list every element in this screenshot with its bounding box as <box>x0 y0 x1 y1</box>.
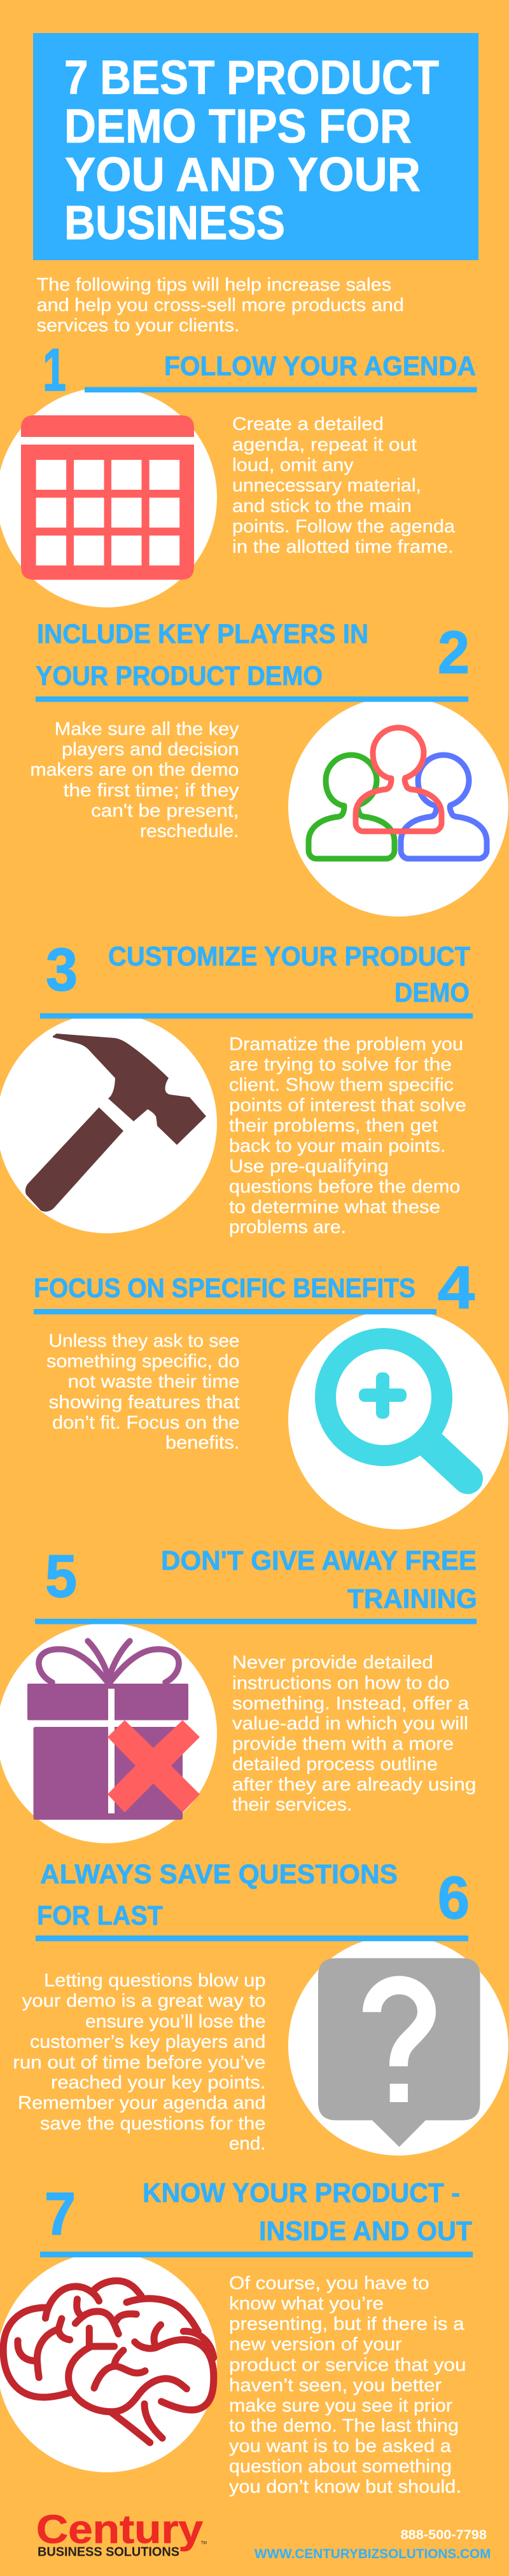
intro text: services to your clients. <box>37 315 240 336</box>
heading: always save questions for last: FOR LAST <box>37 1901 163 1931</box>
icon: crossed-out gift in white circle <box>0 1623 217 1843</box>
heading: don't give away free training <box>35 1546 477 1624</box>
heading: always save questions for last: ALWAYS SAVE QUESTIONS <box>40 1859 398 1890</box>
body text: you want is to be asked a <box>229 2436 452 2456</box>
title banner: DEMO TIPS FOR <box>64 99 412 153</box>
heading: know your product inside and out: KNOW YOUR PRODUCT - <box>143 2178 460 2208</box>
title banner: 7 BEST PRODUCT <box>64 51 439 104</box>
body text: can't be present, <box>91 801 239 821</box>
body text: save the questions for the <box>40 2114 266 2134</box>
icon: hammer in white circle <box>0 1013 217 1233</box>
icon: calendar in white circle <box>0 387 217 607</box>
number 3: 3 <box>46 936 78 1004</box>
heading: include key players <box>36 619 468 702</box>
body text: something. Instead, offer a <box>232 1693 470 1714</box>
body text: Never provide detailed <box>232 1652 433 1673</box>
number 5: 5 <box>45 1543 77 1610</box>
body text <box>30 719 239 841</box>
body text: agenda, repeat it out <box>232 434 417 455</box>
body text: the first time; if they <box>64 780 239 801</box>
heading: follow your agenda: FOLLOW YOUR AGENDA <box>164 351 476 382</box>
panel: tip 7 know your product <box>0 2178 473 2497</box>
body text: end. <box>229 2133 266 2154</box>
body text: not waste their time <box>68 1372 240 1392</box>
heading: know your product inside and out <box>40 2178 473 2257</box>
body text: players and decision <box>62 740 239 760</box>
body text <box>229 2273 466 2497</box>
number 4: 4 <box>438 1254 475 1322</box>
body text: value-add in which you will <box>232 1714 468 1734</box>
heading: focus on specific benefits: FOCUS ON SPECIFIC BENEFITS <box>34 1273 415 1303</box>
title banner <box>33 33 478 260</box>
body text: make sure you see it prior <box>229 2395 452 2416</box>
number 2: 2 <box>438 619 470 686</box>
panel: tip 6 always save questions for last <box>13 1859 508 2156</box>
body text: Dramatize the problem you <box>229 1034 463 1055</box>
body text: product or service that you <box>229 2355 466 2375</box>
intro text: The following tips will help increase sales <box>37 275 391 295</box>
body text: in the allotted time frame. <box>232 537 454 557</box>
logo: Century Business Solutions: TM <box>201 2541 207 2545</box>
heading: customize your product demo: CUSTOMIZE YOUR PRODUCT <box>108 941 470 972</box>
logo: Century Business Solutions: BUSINESS SOLUTIONS <box>38 2545 179 2559</box>
icon: magnifying glass in white circle <box>288 1309 508 1529</box>
body text <box>232 1652 476 1815</box>
body text: your demo is a great way to <box>22 1991 265 2011</box>
body text: presenting, but if there is a <box>229 2314 465 2334</box>
heading: know your product inside and out: INSIDE AND OUT <box>259 2216 472 2247</box>
title banner: BUSINESS <box>64 196 285 249</box>
heading: always save questions for last <box>36 1859 468 1941</box>
number 1: 1 <box>43 336 66 404</box>
body text: questions before the demo <box>229 1177 461 1197</box>
panel: tip 5 don't give away free training <box>0 1543 477 1843</box>
title banner: YOU AND YOUR <box>65 148 421 201</box>
body text: to determine what these <box>229 1197 440 1217</box>
body text: points of interest that solve <box>229 1095 466 1116</box>
panel: tip 1 follow your agenda <box>0 336 477 607</box>
number 7: 7 <box>45 2180 76 2248</box>
body text: to the demo. The last thing <box>229 2416 459 2436</box>
body text: Remember your agenda and <box>18 2093 266 2114</box>
body text: question about something <box>229 2456 452 2477</box>
number 6: 6 <box>438 1864 470 1932</box>
body text: unnecessary material, <box>232 476 421 496</box>
body text: after they are already using <box>232 1775 476 1795</box>
heading: follow your agenda <box>85 351 477 392</box>
body text: their services. <box>232 1795 352 1815</box>
body text: Use pre-qualifying <box>229 1156 389 1177</box>
body text: reached your key points. <box>51 2072 266 2093</box>
body text: and stick to the main <box>232 496 412 516</box>
body text: provide them with a more <box>232 1734 454 1754</box>
contact details: 888-500-7798 <box>401 2528 487 2542</box>
body text: problems are. <box>229 1217 346 1238</box>
intro text: and help you cross-sell more products and <box>37 295 404 315</box>
heading: don't give away free training: DON'T GIVE AWAY FREE <box>161 1546 477 1576</box>
panel: tip 3 customize your product demo <box>0 936 473 1238</box>
body text: ensure you’ll lose the <box>85 2011 266 2032</box>
contact details <box>254 2528 491 2561</box>
body text <box>13 1970 266 2154</box>
body text: loud, omit any <box>232 455 354 476</box>
logo: Century Business Solutions: Century <box>36 2507 203 2552</box>
body text: know what you’re <box>229 2294 384 2314</box>
body text: something specific, do <box>46 1352 239 1372</box>
body text: benefits. <box>165 1433 239 1453</box>
body text: makers are on the demo <box>30 760 239 780</box>
body text: back to your main points. <box>229 1136 445 1156</box>
body text: showing features that <box>48 1392 239 1413</box>
icon: brain in white circle <box>0 2252 217 2472</box>
body text: customer’s key players and <box>30 2032 266 2053</box>
body text: Of course, you have to <box>229 2273 429 2294</box>
icon: red X <box>108 1720 200 1813</box>
heading: customize your product demo: DEMO <box>394 978 470 1008</box>
body text: client. Show them specific <box>229 1075 454 1095</box>
body text: Make sure all the key <box>55 719 239 739</box>
body text: don’t fit. Focus on the <box>52 1413 239 1433</box>
icon: three people in white circle <box>288 696 508 917</box>
body text: reschedule. <box>140 821 239 841</box>
body text: haven’t seen, you better <box>229 2375 442 2395</box>
body text <box>229 1034 466 1238</box>
body text: detailed process outline <box>232 1754 438 1775</box>
body text: you don’t know but should. <box>229 2477 461 2497</box>
body text: Unless they ask to see <box>48 1331 239 1351</box>
body text <box>46 1331 240 1453</box>
icon: question speech bubble in white circle <box>288 1935 508 2156</box>
panel: tip 4 focus on specific benefits <box>34 1254 508 1529</box>
body text: run out of time before you’ve <box>13 2053 265 2073</box>
body text: their problems, then get <box>229 1116 438 1136</box>
body text: new version of your <box>229 2334 402 2355</box>
body text: Letting questions blow up <box>44 1970 266 1991</box>
heading: include key players: YOUR PRODUCT DEMO <box>36 661 323 691</box>
heading: include key players: INCLUDE KEY PLAYERS IN <box>37 619 368 649</box>
body text: are trying to solve for the <box>229 1055 452 1075</box>
heading: customize your product demo <box>40 941 473 1019</box>
heading: don't give away free training: TRAINING <box>347 1584 477 1614</box>
body text: Create a detailed <box>232 414 384 434</box>
body text: points. Follow the agenda <box>232 516 456 537</box>
intro text <box>37 275 404 336</box>
body text <box>232 414 456 557</box>
contact details: WWW.CENTURYBIZSOLUTIONS.COM <box>254 2547 491 2561</box>
panel: tip 2 include key players <box>30 619 508 917</box>
body text: instructions on how to do <box>232 1673 450 1693</box>
